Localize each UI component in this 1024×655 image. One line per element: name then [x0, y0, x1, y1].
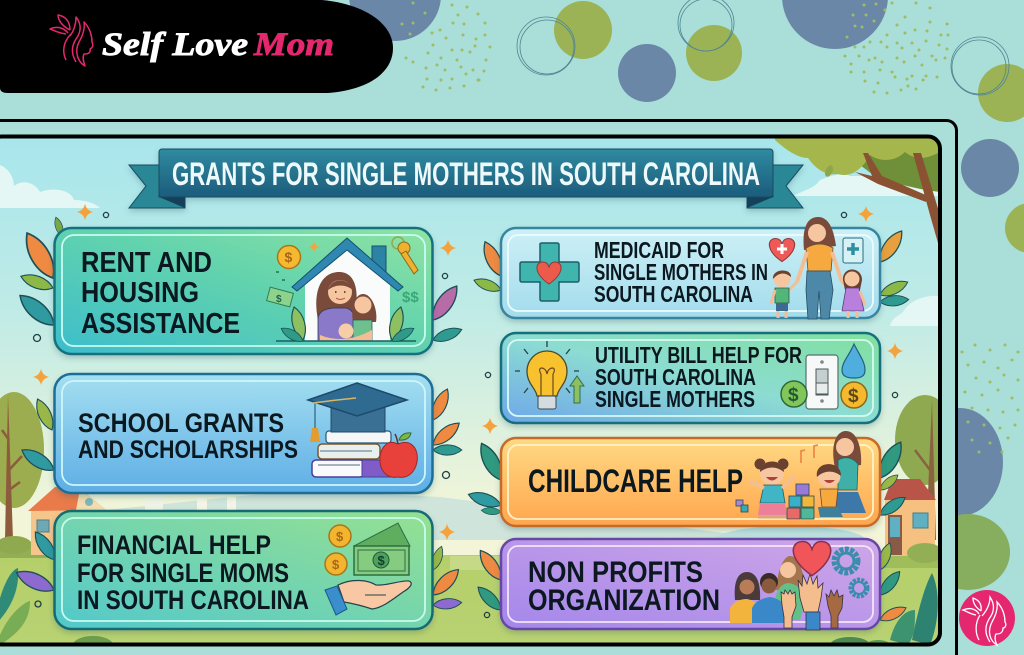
icon: people group [730, 556, 806, 623]
financial text: FINANCIAL HELP [77, 530, 271, 560]
icon: mother in childcare [830, 431, 866, 513]
icon: girl playing [750, 458, 795, 517]
panel: non profits [501, 539, 880, 630]
card box [501, 539, 880, 629]
icon: banknotes: $ [378, 553, 386, 568]
tree right [895, 395, 938, 540]
outer frame [0, 120, 956, 655]
icon: banknotes [354, 523, 410, 575]
header pill [0, 0, 393, 93]
icon: floating heart [769, 238, 795, 262]
school text [78, 408, 298, 464]
title banner [129, 149, 803, 208]
icon: utility coins: $ [848, 386, 859, 407]
distant hill [108, 494, 725, 540]
clouds [0, 165, 938, 326]
medicaid text: SOUTH CAROLINA [594, 281, 753, 307]
icon: light bulb [515, 341, 579, 409]
card box [501, 333, 880, 423]
utility text [595, 342, 802, 412]
icon: coins: $ [336, 529, 344, 544]
scene background [0, 138, 955, 654]
card box [501, 228, 880, 318]
icon: light switch [806, 355, 838, 409]
utility text: UTILITY BILL HELP FOR [595, 342, 802, 368]
icon: coins: $ [332, 557, 340, 572]
icon: clipboard [843, 238, 863, 263]
icon: notes [801, 445, 818, 463]
icon: utility coins [781, 381, 867, 408]
icon: boy playing [817, 464, 843, 517]
card box [54, 228, 432, 354]
icon: logo face and leaves [50, 15, 93, 66]
tree left [0, 392, 44, 554]
icon: coins [325, 525, 351, 575]
icon: water drop [842, 344, 865, 378]
icon: apple [380, 433, 417, 477]
school text: AND SCHOLARSHIPS [78, 436, 298, 464]
ribbon body [159, 149, 773, 197]
panel: rent and housing [54, 228, 432, 354]
title: GRANTS FOR SINGLE MOTHERS IN SOUTH CAROLINA [172, 156, 760, 192]
non profits text: NON PROFITS [528, 556, 703, 589]
logo wordmark: Self Love [102, 27, 248, 63]
financial text [77, 530, 309, 615]
ribbon tails [129, 165, 185, 208]
logo accent word: Mom [253, 27, 334, 63]
rent text: ASSISTANCE [81, 308, 240, 340]
panel: medicaid [501, 217, 880, 319]
icon: coin and bill [267, 242, 419, 307]
panel: childcare [501, 431, 880, 526]
icon: gears [834, 549, 868, 596]
medicaid text: MEDICAID FOR [594, 237, 724, 263]
school text: SCHOOL GRANTS [78, 408, 284, 438]
panel: utility bill [501, 333, 880, 423]
decorative circles and dots [349, 0, 1024, 590]
financial text: FOR SINGLE MOMS [77, 558, 289, 588]
foreground plants [0, 568, 938, 642]
icon: coin and bill: $ [284, 249, 292, 265]
brand header [0, 0, 393, 93]
icon: mother with children [771, 217, 865, 319]
medicaid text: SINGLE MOTHERS IN [594, 259, 768, 285]
childcare text: CHILDCARE HELP [528, 463, 743, 499]
icon: heart [793, 542, 831, 576]
rent text: RENT AND [81, 247, 212, 279]
decorative sparkles [33, 204, 903, 618]
medicaid text [594, 237, 768, 307]
inner frame [0, 136, 940, 644]
house right [884, 479, 943, 563]
icon: round logo badge [959, 590, 1015, 646]
tree top right [775, 138, 940, 250]
card box [54, 511, 432, 629]
icon: house with family [276, 238, 416, 345]
icon: medical cross with heart [520, 243, 579, 301]
card box [54, 374, 432, 493]
icon: coin and bill: $$ [402, 289, 419, 306]
icon: blocks [736, 484, 814, 519]
panel: school grants [54, 374, 432, 493]
card box [501, 438, 880, 526]
utility text: SOUTH CAROLINA [595, 364, 756, 390]
panel: financial help [54, 511, 432, 629]
non profits text: ORGANIZATION [528, 584, 720, 617]
house left [28, 487, 106, 555]
icon: raised hands [781, 574, 843, 630]
icon: key [392, 237, 418, 274]
rent text [81, 247, 240, 340]
grass [0, 542, 940, 645]
icon: utility coins: $ [788, 385, 799, 406]
non profits text [528, 556, 720, 617]
icon: coin and bill: $ [276, 294, 282, 305]
icon: open hand [325, 580, 411, 615]
rent text: HOUSING [81, 277, 199, 309]
icon: graduation cap [308, 383, 407, 442]
icon: up arrow [570, 376, 584, 403]
utility text: SINGLE MOTHERS [595, 386, 755, 412]
icon: books [312, 431, 394, 477]
financial text: IN SOUTH CAROLINA [77, 585, 309, 615]
decorative leaves [13, 216, 910, 625]
